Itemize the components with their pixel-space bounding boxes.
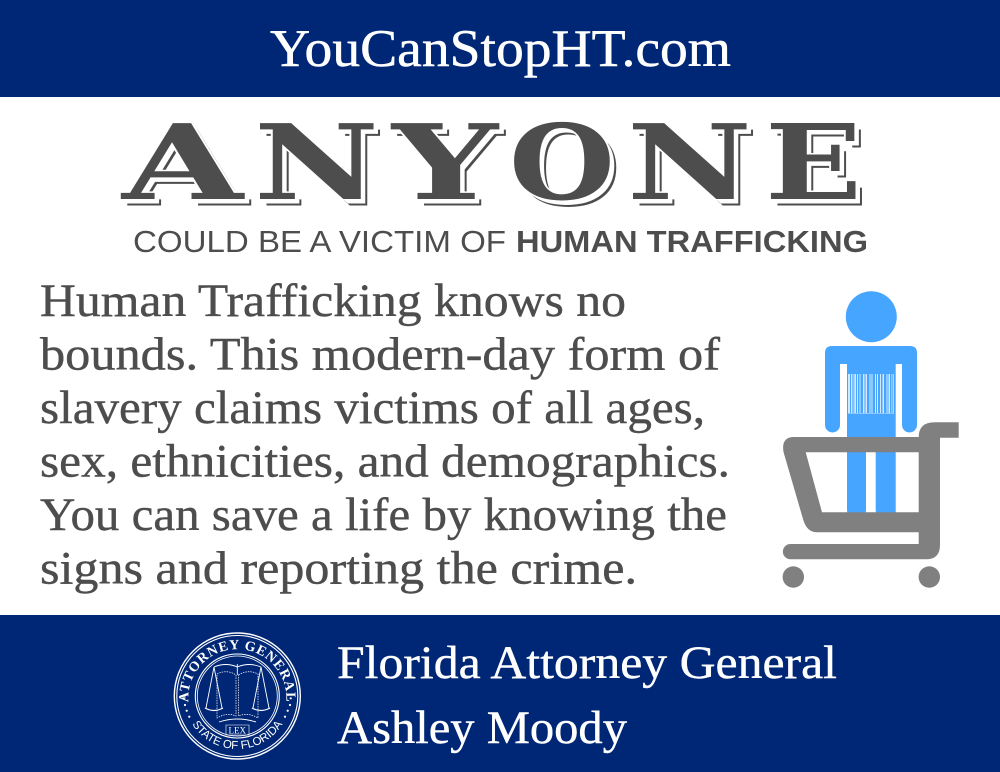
title: ANYONE: N — [254, 101, 379, 224]
title: ANYONE: O — [516, 108, 622, 230]
body text: signs and reporting the crime. — [40, 542, 637, 594]
bottom banner — [0, 615, 1000, 772]
title: ANYONE: A — [121, 101, 245, 224]
seal: Attorney General — [174, 632, 301, 760]
subtitle: COULD BE A VICTIM OF — [133, 226, 506, 259]
title: ANYONE: A — [125, 106, 249, 228]
title: ANYONE: N — [634, 108, 758, 230]
title: ANYONE: O — [514, 106, 620, 228]
title: ANYONE: O — [509, 101, 615, 224]
title: ANYONE: N — [260, 108, 386, 230]
title: ANYONE: E — [772, 108, 868, 230]
body text: slavery claims victims of all ages, — [40, 382, 705, 434]
body text: Human Trafficking knows no — [40, 275, 626, 327]
icon: shopping cart — [783, 422, 959, 588]
website heading: YouCanStopHT.com — [270, 20, 731, 78]
body text — [40, 275, 730, 594]
icon: barcode — [848, 374, 894, 414]
body text: You can save a life by knowing the — [40, 489, 727, 541]
title: ANYONE: A — [127, 108, 251, 230]
seal: Attorney General: ATTORNEY GENERAL — [179, 640, 296, 702]
title: ANYONE — [121, 101, 869, 230]
footer text — [337, 637, 837, 754]
body text: sex, ethnicities, and demographics. — [40, 436, 730, 488]
top banner — [0, 0, 1000, 97]
title: ANYONE: E — [765, 101, 862, 224]
title: ANYONE: E — [770, 106, 866, 228]
title: ANYONE: N — [258, 106, 384, 228]
title: ANYONE: Y — [391, 101, 500, 224]
title: ANYONE: Y — [397, 108, 507, 230]
icon: person — [825, 291, 917, 515]
seal: Attorney General: LEX — [229, 726, 247, 736]
title: ANYONE: N — [632, 106, 756, 228]
seal: Attorney General: STATE OF FLORIDA — [193, 721, 283, 749]
body text: bounds. This modern-day form of — [40, 328, 720, 380]
title: ANYONE: Y — [395, 106, 505, 228]
footer text: Florida Attorney General — [337, 637, 837, 689]
footer text: Ashley Moody — [337, 702, 628, 754]
title: ANYONE: N — [627, 101, 752, 224]
subtitle: HUMAN TRAFFICKING — [516, 226, 868, 259]
subtitle — [133, 226, 868, 259]
icon: person with barcode in shopping cart — [783, 291, 959, 588]
